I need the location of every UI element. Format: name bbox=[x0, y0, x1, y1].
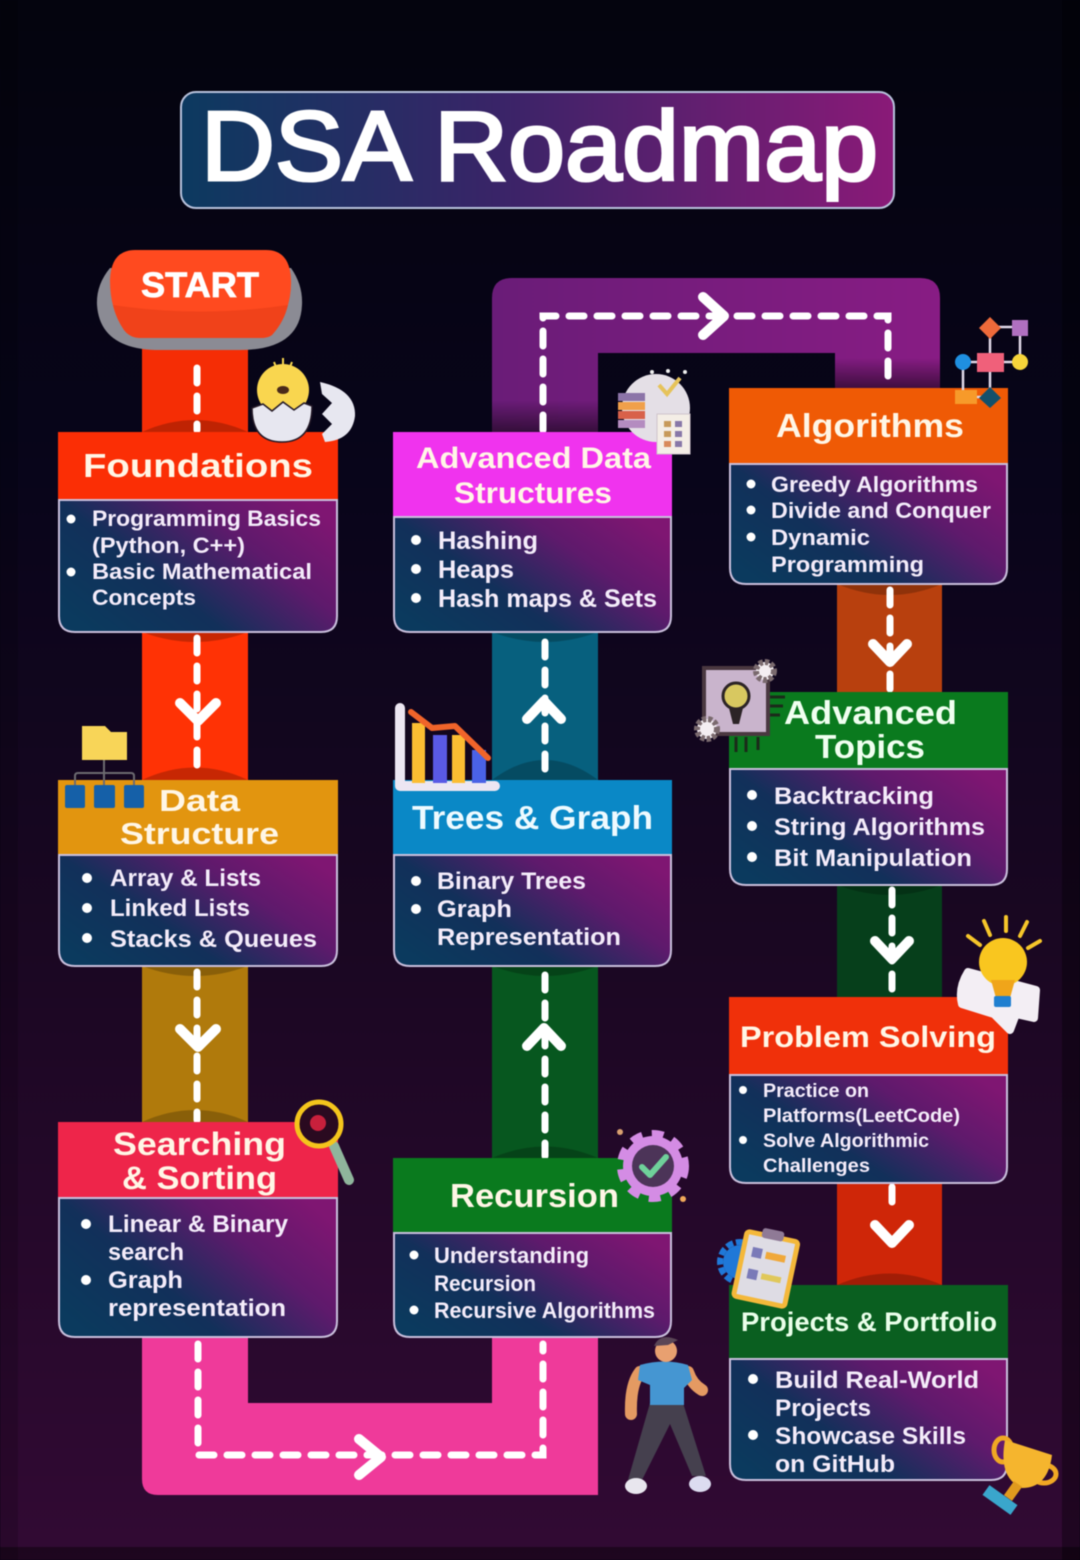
icon: algorithm flowchart bbox=[955, 317, 1028, 408]
list: trees and graph: Binary Trees bbox=[437, 868, 586, 895]
header: trees and graph bbox=[393, 780, 672, 855]
header: problem solving bbox=[729, 997, 1008, 1075]
list: searching and sorting bbox=[59, 1198, 337, 1337]
panel: searching and sorting bbox=[58, 1122, 338, 1337]
header: advanced data structures bbox=[393, 432, 672, 517]
list: searching and sorting: search bbox=[108, 1239, 184, 1266]
list: foundations: Concepts bbox=[92, 585, 196, 610]
list: trees and graph: Representation bbox=[437, 924, 621, 951]
panel: data structure bbox=[58, 780, 338, 966]
list: recursion: Recursion bbox=[434, 1271, 536, 1296]
panel: advanced topics bbox=[729, 692, 1008, 885]
panel: recursion bbox=[393, 1158, 672, 1337]
icon: gear with check bbox=[617, 1129, 686, 1202]
list: problem solving: Platforms(LeetCode) bbox=[763, 1106, 960, 1127]
header: advanced topics: Advanced bbox=[784, 694, 957, 731]
icon: hatching chick bbox=[252, 358, 355, 442]
icon: light bulb note bbox=[961, 917, 1040, 1030]
list: advanced topics: String Algorithms bbox=[774, 814, 985, 841]
list: problem solving bbox=[730, 1075, 1007, 1183]
list: data structure: Array & Lists bbox=[110, 865, 261, 892]
panel: problem solving bbox=[729, 997, 1008, 1183]
header: recursion bbox=[393, 1158, 672, 1233]
list: problem solving: Practice on bbox=[763, 1081, 869, 1102]
track: foundations to data structure bbox=[142, 630, 248, 782]
panel: projects and portfolio bbox=[729, 1285, 1008, 1480]
list: algorithms: Greedy Algorithms bbox=[771, 472, 978, 497]
track: problem solving to projects bbox=[837, 1181, 942, 1287]
path dashes and arrows bbox=[180, 297, 909, 1475]
list: searching and sorting: Linear & Binary bbox=[108, 1211, 289, 1238]
track: start to foundations bbox=[142, 345, 248, 435]
list: trees and graph bbox=[394, 855, 671, 966]
header: projects and portfolio: Projects & Portfolio bbox=[741, 1307, 997, 1337]
list: advanced data structures bbox=[394, 517, 671, 632]
header: problem solving: Problem Solving bbox=[740, 1021, 996, 1054]
icon: idea chip with gears bbox=[697, 662, 785, 752]
header: advanced topics bbox=[729, 692, 1008, 769]
list: projects and portfolio: Build Real-World bbox=[775, 1367, 979, 1394]
header: advanced data structures: Structures bbox=[454, 477, 612, 510]
header: algorithms bbox=[729, 388, 1008, 464]
track: advanced data structures to algorithms bbox=[492, 278, 940, 435]
panel: advanced data structures bbox=[393, 432, 672, 632]
header: advanced topics: Topics bbox=[815, 728, 925, 765]
icon: trophy bbox=[986, 1438, 1056, 1510]
header: algorithms: Algorithms bbox=[776, 407, 964, 444]
list: recursion: Understanding bbox=[434, 1243, 589, 1268]
list: searching and sorting: representation bbox=[108, 1295, 286, 1322]
track: recursion to trees bbox=[492, 964, 598, 1160]
list: trees and graph: Graph bbox=[437, 896, 512, 923]
list: projects and portfolio: Showcase Skills bbox=[775, 1423, 966, 1450]
list: projects and portfolio: on GitHub bbox=[775, 1451, 895, 1478]
icon: folder tree bbox=[65, 726, 144, 808]
header: searching and sorting: & Sorting bbox=[122, 1160, 277, 1196]
start button: START bbox=[141, 266, 259, 305]
list: advanced topics bbox=[730, 769, 1007, 885]
panel: foundations bbox=[58, 432, 338, 632]
track: data structure to searching bbox=[142, 964, 248, 1124]
list: algorithms: Dynamic bbox=[771, 525, 870, 550]
panel: trees and graph bbox=[393, 780, 672, 966]
list: recursion: Recursive Algorithms bbox=[434, 1298, 655, 1323]
icon: clipboard with gear bbox=[720, 1224, 800, 1307]
header: recursion: Recursion bbox=[450, 1177, 619, 1214]
header: data structure: Data bbox=[159, 783, 241, 818]
list: projects and portfolio bbox=[730, 1359, 1007, 1480]
list: problem solving: Challenges bbox=[763, 1156, 870, 1177]
track: algorithms to advanced topics bbox=[837, 582, 942, 694]
start button bbox=[97, 250, 302, 350]
header: searching and sorting bbox=[58, 1122, 338, 1198]
track: trees to advanced data structures bbox=[492, 630, 598, 782]
header: data structure: Structure bbox=[120, 816, 279, 851]
list: foundations: Basic Mathematical bbox=[92, 559, 312, 584]
icon: bar chart bbox=[400, 708, 495, 786]
list: searching and sorting: Graph bbox=[108, 1267, 183, 1294]
header: data structure bbox=[58, 780, 338, 855]
header: projects and portfolio bbox=[729, 1285, 1008, 1359]
header: searching and sorting: Searching bbox=[113, 1126, 286, 1162]
track: searching to recursion bbox=[142, 1335, 598, 1495]
list: algorithms bbox=[730, 464, 1007, 584]
list: data structure bbox=[59, 855, 337, 966]
list: problem solving: Solve Algorithmic bbox=[763, 1131, 929, 1152]
list: advanced topics: Bit Manipulation bbox=[774, 845, 972, 872]
track: advanced topics to problem solving bbox=[837, 883, 942, 999]
icon: walking person bbox=[625, 1337, 711, 1494]
title: DSA Roadmap bbox=[201, 91, 878, 201]
list: advanced data structures: Hash maps & Sets bbox=[438, 585, 657, 613]
list: data structure: Stacks & Queues bbox=[110, 926, 317, 953]
list: projects and portfolio: Projects bbox=[775, 1395, 871, 1422]
list: foundations: Programming Basics bbox=[92, 506, 321, 531]
icon: data planner bbox=[618, 369, 690, 454]
list: advanced data structures: Hashing bbox=[438, 527, 538, 555]
icon: magnifying glass bbox=[297, 1102, 349, 1180]
list: foundations: (Python, C++) bbox=[92, 533, 245, 558]
list: advanced data structures: Heaps bbox=[438, 556, 514, 584]
list: algorithms: Programming bbox=[771, 552, 924, 577]
list: foundations bbox=[59, 500, 337, 632]
header: trees and graph: Trees & Graph bbox=[412, 799, 653, 836]
header: foundations: Foundations bbox=[83, 447, 313, 484]
header: foundations bbox=[58, 432, 338, 500]
list: advanced topics: Backtracking bbox=[774, 783, 934, 810]
header: advanced data structures: Advanced Data bbox=[416, 442, 651, 475]
list: algorithms: Divide and Conquer bbox=[771, 498, 991, 523]
list: data structure: Linked Lists bbox=[110, 895, 250, 922]
panel: algorithms bbox=[729, 388, 1008, 584]
list: recursion bbox=[394, 1233, 671, 1337]
